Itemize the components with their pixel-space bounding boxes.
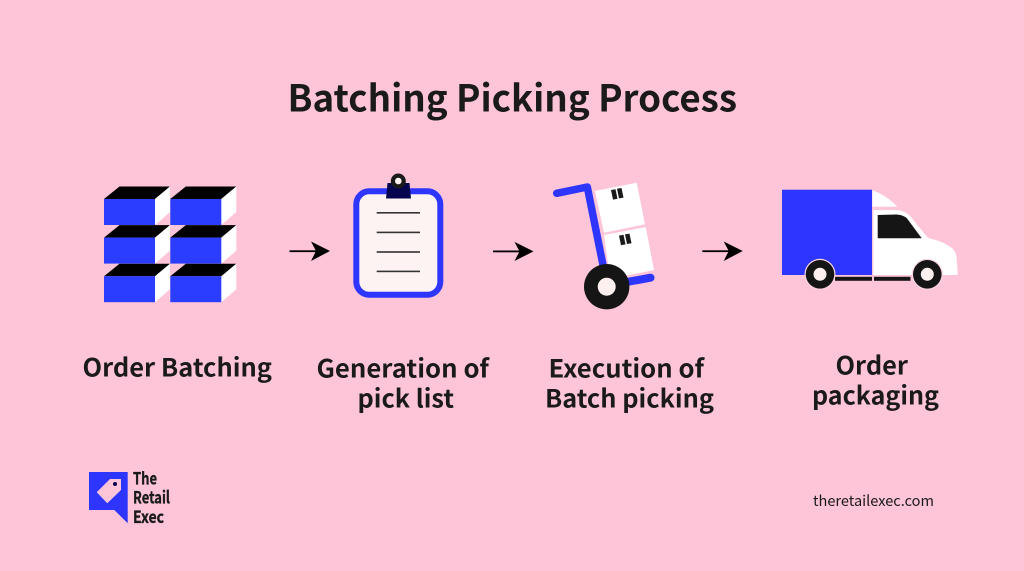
step label: execution of batch picking: Execution of — [548, 350, 706, 386]
step label: order packaging: packaging — [812, 376, 939, 412]
step label: execution of batch picking — [545, 350, 714, 416]
arrow: step 1 to step 2 — [290, 242, 330, 261]
title: Batching Picking Process — [288, 68, 737, 122]
step label: execution of batch picking: Batch picking — [545, 380, 714, 416]
logo wordmark: The — [133, 464, 157, 490]
logo: the retail exec — [89, 464, 170, 528]
logo wordmark: Exec — [133, 503, 164, 528]
step label: order packaging: Order — [836, 346, 908, 382]
logo mark: price tag speech bubble — [89, 472, 128, 523]
arrow: step 2 to step 3 — [493, 242, 534, 261]
step label: generation of pick list — [316, 350, 491, 416]
icon: clipboard — [356, 174, 440, 295]
icon: stacked order boxes — [104, 186, 236, 302]
step label: order packaging — [812, 346, 939, 412]
icon: hand truck with boxes — [557, 183, 654, 309]
step label: order batching: Order Batching — [82, 348, 272, 384]
arrow: step 3 to step 4 — [702, 242, 743, 261]
logo wordmark: Retail — [133, 484, 170, 508]
step label: generation of pick list: Generation of — [316, 350, 491, 386]
logo wordmark — [133, 464, 170, 528]
website url: theretailexec.com — [813, 490, 934, 511]
icon: delivery truck — [782, 190, 958, 290]
step label: generation of pick list: pick list — [358, 380, 454, 416]
